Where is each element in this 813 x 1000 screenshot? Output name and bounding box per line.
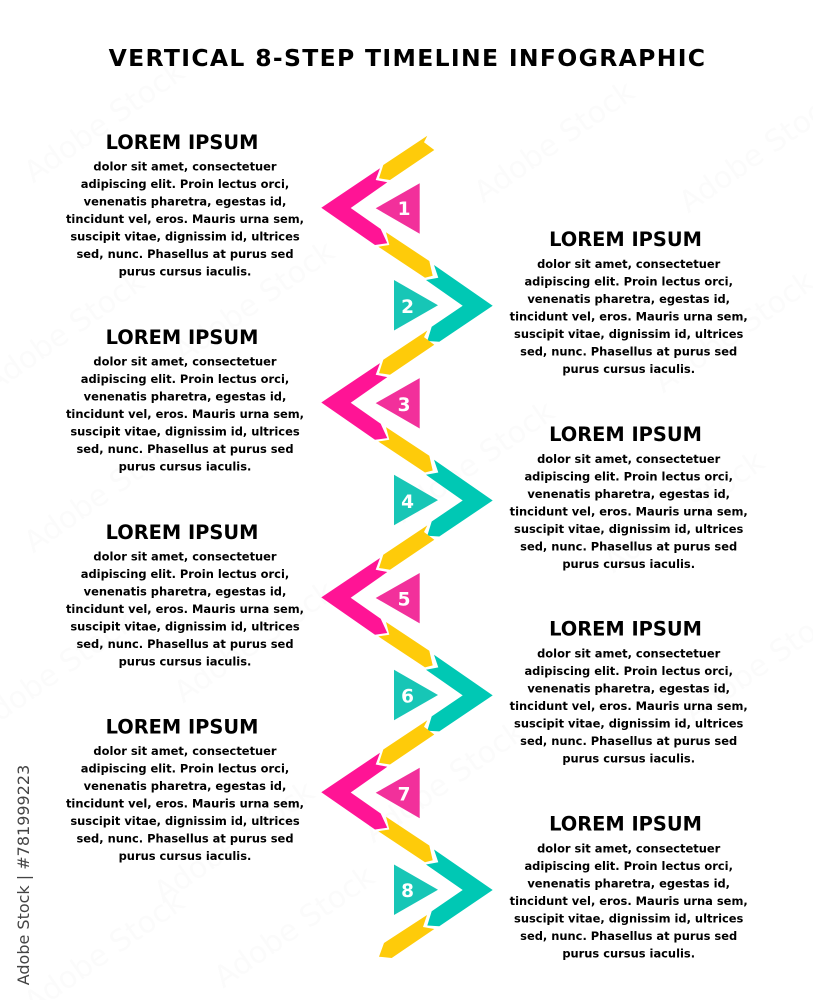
text block: step 8: adipiscing elit. Proin lectus orci, — [524, 859, 733, 873]
number: 5: 5 — [398, 590, 410, 610]
faint stock watermark pattern: Adobe Stock — [18, 54, 192, 190]
text block: step 3: purus cursus iaculis. — [119, 460, 251, 474]
text block: step 2: venenatis pharetra, egestas id, — [527, 292, 730, 306]
title: VERTICAL 8-STEP TIMELINE INFOGRAPHIC — [109, 44, 706, 72]
step 5 — [66, 521, 420, 668]
chevron: step 8 — [426, 850, 493, 926]
number: 8: 8 — [401, 881, 414, 902]
timeline connector: 2 to 3 — [379, 330, 434, 375]
text block: step 6: venenatis pharetra, egestas id, — [527, 682, 730, 696]
triangle badge: step 1 — [376, 183, 420, 234]
text block: step 1 — [66, 131, 304, 278]
text block: step 1: dolor sit amet, consectetuer — [93, 160, 277, 174]
text block: step 2: sed, nunc. Phasellus at purus sed — [520, 344, 737, 358]
text block: step 1: LOREM IPSUM — [106, 131, 258, 154]
step 8 — [394, 812, 748, 960]
chevron: step 2 — [426, 265, 493, 342]
text block: step 2: purus cursus iaculis. — [562, 362, 695, 376]
text block: step 3: suscipit vitae, dignissim id, ultrices — [70, 424, 300, 438]
triangle badge: step 5 — [376, 573, 420, 623]
text block: step 7 — [66, 716, 304, 863]
timeline connector: 1 to 2 — [378, 232, 433, 278]
text block: step 4: suscipit vitae, dignissim id, ultrices — [514, 522, 744, 536]
text block: step 2: tincidunt vel, eros. Mauris urna sem, — [510, 310, 748, 324]
timeline connector: 5 to 6 — [378, 622, 433, 667]
text block: step 1: venenatis pharetra, egestas id, — [84, 194, 286, 208]
faint stock watermark pattern: Adobe Stock — [168, 574, 342, 710]
faint stock watermark pattern: Adobe Stock — [208, 859, 382, 995]
triangle badge: step 7 — [376, 768, 420, 818]
text block: step 8: LOREM IPSUM — [549, 812, 702, 836]
chevron: step 5 — [321, 558, 387, 635]
text block: step 7: suscipit vitae, dignissim id, ultrices — [70, 814, 300, 828]
faint stock watermark pattern: Adobe Stock — [468, 74, 642, 210]
step 1 — [66, 131, 420, 278]
triangle badge: step 4 — [394, 475, 438, 525]
text block: step 2: dolor sit amet, consectetuer — [537, 257, 721, 271]
text block: step 7: dolor sit amet, consectetuer — [93, 744, 277, 758]
faint stock watermark pattern: Adobe Stock — [598, 444, 772, 580]
step 6 — [394, 618, 748, 766]
step 4 — [394, 423, 748, 571]
triangle badge: step 8 — [394, 864, 438, 915]
text block: step 7: purus cursus iaculis. — [119, 849, 251, 863]
text block: step 4: sed, nunc. Phasellus at purus sed — [520, 540, 737, 554]
text block: step 8: purus cursus iaculis. — [562, 946, 695, 960]
text block: step 2: LOREM IPSUM — [549, 228, 702, 251]
faint stock watermark pattern: Adobe Stock — [18, 424, 192, 560]
stock credit: Adobe Stock | #781999223 — [14, 765, 33, 985]
chevron: step 7 — [321, 753, 387, 830]
text block: step 1: sed, nunc. Phasellus at purus sed — [76, 247, 294, 261]
text block: step 6: sed, nunc. Phasellus at purus sed — [520, 734, 737, 748]
text block: step 7: tincidunt vel, eros. Mauris urna sem, — [66, 796, 304, 810]
triangle badge: step 2 — [394, 280, 438, 330]
text block: step 7: venenatis pharetra, egestas id, — [84, 779, 286, 793]
text block: step 5 — [66, 521, 304, 668]
faint stock watermark pattern: Adobe Stock — [148, 774, 322, 910]
text block: step 1: suscipit vitae, dignissim id, ultrices — [70, 230, 300, 244]
faint stock watermark pattern: Adobe Stock — [358, 714, 532, 850]
text block: step 7: LOREM IPSUM — [106, 716, 258, 738]
text block: step 3: venenatis pharetra, egestas id, — [84, 390, 286, 404]
text block: step 7: adipiscing elit. Proin lectus orci, — [81, 762, 289, 776]
text block: step 2: adipiscing elit. Proin lectus orci, — [524, 274, 733, 288]
triangle badge: step 3 — [376, 378, 420, 428]
chevron: step 1 — [321, 168, 387, 245]
timeline connector: top yellow arrow — [379, 136, 434, 180]
text block: step 8: tincidunt vel, eros. Mauris urna sem, — [510, 894, 748, 908]
text block: step 7: sed, nunc. Phasellus at purus sed — [76, 832, 294, 846]
chevron: step 3 — [321, 363, 387, 440]
chevron: step 4 — [426, 460, 493, 536]
text block: step 4 — [510, 423, 748, 571]
number: 4: 4 — [401, 492, 414, 513]
number: 3: 3 — [398, 395, 410, 416]
text block: step 3: dolor sit amet, consectetuer — [93, 354, 277, 368]
number: 2: 2 — [401, 297, 414, 318]
text block: step 1: adipiscing elit. Proin lectus orci, — [81, 177, 289, 191]
text block: step 6: suscipit vitae, dignissim id, ultrices — [514, 716, 744, 730]
number: 6: 6 — [401, 686, 414, 708]
text block: step 4: purus cursus iaculis. — [562, 557, 695, 571]
text block: step 8 — [510, 812, 748, 960]
text block: step 4: LOREM IPSUM — [549, 423, 702, 446]
text block: step 4: tincidunt vel, eros. Mauris urna sem, — [510, 504, 748, 518]
text block: step 8: venenatis pharetra, egestas id, — [527, 876, 730, 890]
chevron: step 6 — [426, 655, 493, 731]
timeline connector: bottom yellow arrow — [379, 915, 434, 958]
timeline connector: 4 to 5 — [379, 525, 434, 570]
step 2 — [394, 228, 748, 376]
text block: step 1: tincidunt vel, eros. Mauris urna sem, — [66, 212, 304, 226]
timeline connector: 6 to 7 — [379, 720, 434, 764]
text block: step 8: sed, nunc. Phasellus at purus sed — [520, 929, 737, 943]
text block: step 2: suscipit vitae, dignissim id, ultrices — [514, 327, 744, 341]
text block: step 3: tincidunt vel, eros. Mauris urna sem, — [66, 407, 304, 421]
text block: step 8: suscipit vitae, dignissim id, ultrices — [514, 912, 744, 926]
text block: step 6: dolor sit amet, consectetuer — [537, 646, 721, 660]
triangle badge: step 6 — [394, 670, 438, 720]
text block: step 5: tincidunt vel, eros. Mauris urna sem, — [66, 602, 304, 616]
text block: step 5: suscipit vitae, dignissim id, ultrices — [70, 620, 300, 634]
text block: step 5: LOREM IPSUM — [106, 521, 258, 544]
text block: step 5: venenatis pharetra, egestas id, — [84, 584, 286, 598]
text block: step 2 — [510, 228, 748, 376]
text block: step 3: sed, nunc. Phasellus at purus sed — [76, 442, 294, 456]
text block: step 5: purus cursus iaculis. — [119, 654, 251, 668]
timeline connector: 3 to 4 — [378, 427, 433, 472]
number: 7: 7 — [398, 784, 410, 806]
number: 1: 1 — [398, 199, 410, 220]
text block: step 6: adipiscing elit. Proin lectus orci, — [524, 664, 733, 678]
faint stock watermark pattern: Adobe Stock — [168, 234, 342, 370]
text block: step 3: LOREM IPSUM — [106, 326, 258, 349]
text block: step 6: tincidunt vel, eros. Mauris urna sem, — [510, 699, 748, 713]
timeline connector: 7 to 8 — [378, 817, 433, 862]
faint stock watermark pattern: Adobe Stock — [388, 394, 562, 530]
text block: step 6: purus cursus iaculis. — [562, 752, 695, 766]
step 7 — [66, 716, 420, 863]
text block: step 4: adipiscing elit. Proin lectus orci, — [524, 470, 733, 484]
text block: step 5: dolor sit amet, consectetuer — [93, 550, 277, 564]
text block: step 4: dolor sit amet, consectetuer — [537, 452, 721, 466]
text block: step 6 — [510, 618, 748, 766]
text block: step 8: dolor sit amet, consectetuer — [537, 842, 721, 856]
text block: step 6: LOREM IPSUM — [549, 618, 702, 640]
text block: step 3 — [66, 326, 304, 474]
text block: step 1: purus cursus iaculis. — [119, 264, 251, 278]
text block: step 5: sed, nunc. Phasellus at purus sed — [76, 637, 294, 651]
text block: step 3: adipiscing elit. Proin lectus orci, — [81, 372, 289, 386]
text block: step 5: adipiscing elit. Proin lectus orci, — [81, 567, 289, 581]
text block: step 4: venenatis pharetra, egestas id, — [527, 487, 730, 501]
step 3 — [66, 326, 420, 474]
